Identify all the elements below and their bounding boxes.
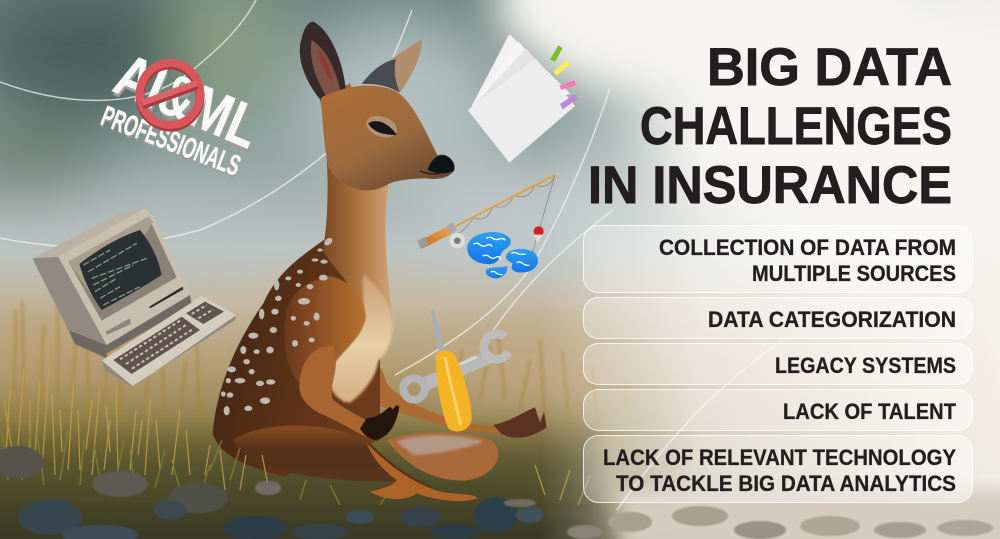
icon: stack of papers with sticky tabs — [468, 34, 578, 163]
wrench — [403, 334, 508, 400]
panel: collection of data: MULTIPLE SOURCES — [752, 261, 956, 286]
icon: retro computer — [32, 208, 237, 387]
deer: spotted body — [213, 240, 380, 477]
deer: far arm — [360, 364, 547, 438]
logo text: AI&ML: AI&ML — [106, 41, 270, 161]
deer: head — [300, 22, 454, 190]
deer: shoulder — [284, 277, 366, 387]
deer: white spots — [221, 236, 334, 415]
deer: back leg — [387, 432, 498, 481]
title — [588, 38, 952, 215]
icon: fishing rod and water — [417, 175, 555, 278]
panel: lack of relevant technology — [584, 436, 972, 502]
foreground grass and rocks — [0, 350, 993, 539]
deer: near arm — [299, 346, 399, 440]
background: right side haze — [495, 0, 1000, 539]
title: BIG DATA — [707, 38, 952, 97]
panel: collection of data — [584, 226, 972, 292]
panel: data categorization — [584, 298, 972, 338]
panel: collection of data: COLLECTION OF DATA FROM — [659, 235, 956, 260]
deer: far ear — [362, 39, 422, 93]
icon: wrench and screwdriver — [403, 309, 508, 431]
background: distant grass — [14, 300, 630, 450]
rocks — [0, 446, 993, 539]
logo text: AI&ML: AI&ML — [106, 44, 271, 165]
background: ground under the deer — [0, 415, 600, 539]
panel: lack of talent: LACK OF TALENT — [783, 399, 956, 424]
deer: lower body and crossed leg — [233, 426, 477, 501]
icon: prohibition sign — [140, 63, 200, 127]
title: CHALLENGES — [640, 97, 952, 156]
logo text: PROFESSIONALS — [96, 101, 245, 185]
deer illustration — [213, 22, 547, 501]
deer: neck — [320, 83, 392, 403]
keyboard — [102, 296, 237, 387]
panel: legacy systems — [584, 344, 972, 384]
panel: data categorization: DATA CATEGORIZATION — [708, 307, 956, 332]
icon: AI and ML professionals crossed out — [96, 41, 272, 185]
deer: pale chest — [329, 273, 393, 403]
water puddles — [467, 232, 538, 278]
panel: lack of talent — [584, 390, 972, 430]
panel: lack of relevant technology: LACK OF RELEVANT TECHNOLOGY — [603, 445, 956, 470]
logo text: PROFESSIONALS: PROFESSIONALS — [97, 103, 245, 185]
sticky tabs — [550, 45, 578, 109]
fishing line — [453, 175, 555, 267]
bobber — [534, 226, 544, 236]
title: IN INSURANCE — [588, 156, 952, 215]
screwdriver — [431, 309, 472, 431]
logo text: PROFESSIONALS: PROFESSIONALS — [97, 101, 245, 183]
panel: legacy systems: LEGACY SYSTEMS — [775, 353, 956, 378]
rod — [453, 175, 555, 227]
panel: lack of relevant technology: TO TACKLE BIG DATA ANALYTICS — [616, 471, 956, 496]
